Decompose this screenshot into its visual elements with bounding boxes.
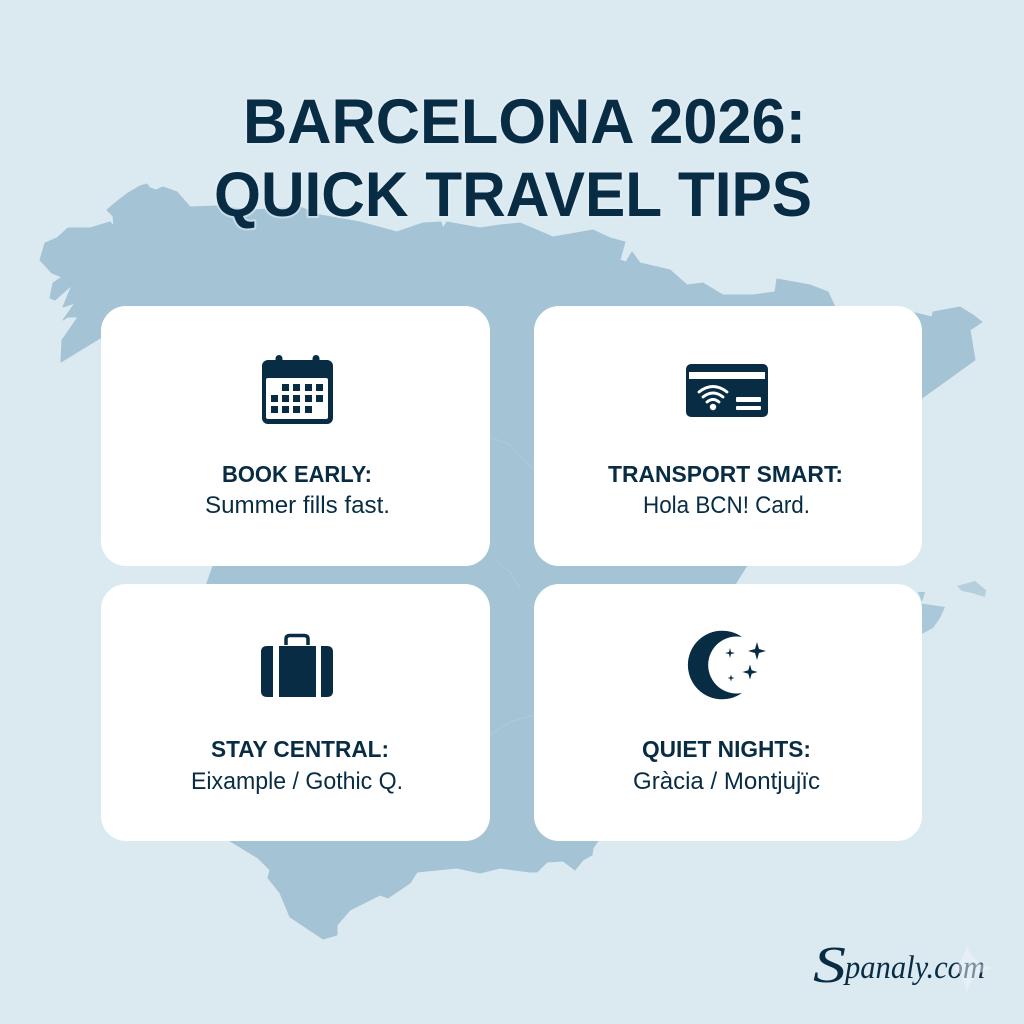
icon: calendar bbox=[262, 355, 333, 424]
text: quiet nights: QUIET NIGHTS: bbox=[642, 736, 811, 762]
panel: stay central bbox=[101, 584, 490, 841]
text: transport smart: TRANSPORT SMART: bbox=[608, 461, 843, 487]
text: book early bbox=[205, 461, 390, 519]
text: stay central: Eixample / Gothic Q. bbox=[191, 768, 403, 795]
Balearic islands bbox=[918, 581, 986, 636]
text: book early: BOOK EARLY: bbox=[222, 461, 372, 487]
logo: Spanaly.com: panaly.com bbox=[843, 950, 985, 986]
panel: book early bbox=[101, 306, 490, 566]
text: quiet nights: Gràcia / Montjujïc bbox=[633, 768, 820, 795]
text: stay central bbox=[191, 736, 403, 795]
text: stay central: STAY CENTRAL: bbox=[211, 736, 389, 762]
logo: Spanaly.com bbox=[813, 937, 992, 994]
panel: quiet nights bbox=[534, 584, 922, 841]
text: transport smart bbox=[608, 461, 843, 519]
title: BARCELONA 2026: bbox=[243, 87, 806, 157]
text: quiet nights bbox=[633, 736, 820, 795]
panel: transport smart bbox=[534, 306, 922, 566]
title: QUICK TRAVEL TIPS bbox=[214, 160, 812, 230]
icon: moon and stars bbox=[688, 631, 766, 699]
map of Spain bbox=[40, 184, 982, 939]
icon: suitcase bbox=[261, 636, 333, 697]
title bbox=[214, 87, 812, 230]
text: book early: Summer fills fast. bbox=[205, 492, 390, 519]
text: transport smart: Hola BCN! Card. bbox=[643, 492, 810, 519]
icon: contactless travel card bbox=[686, 364, 768, 417]
logo: Spanaly.com: S bbox=[813, 937, 846, 994]
